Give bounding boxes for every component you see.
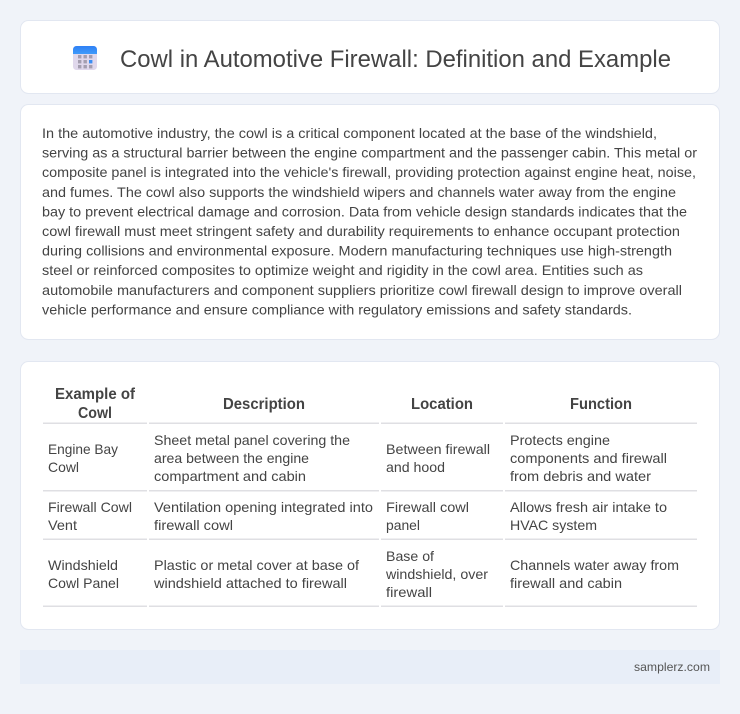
- title: Cowl in Automotive Firewall: Definition and Example: [120, 46, 671, 73]
- table row: engine bay cowl: from debris and water: [510, 468, 651, 484]
- table row: engine bay cowl: [48, 432, 667, 484]
- icon: calendar: [73, 46, 97, 70]
- text block: cowl description: composite panel is integrated into the vehicle's firewall, providing protection against engine heat, noise,: [42, 164, 696, 180]
- table row: engine bay cowl: compartment and cabin: [154, 468, 306, 484]
- table row: firewall cowl vent: Ventilation opening integrated into: [154, 499, 373, 515]
- table row: engine bay cowl: components and firewall: [510, 450, 667, 466]
- table header row: Description: [223, 396, 305, 413]
- table row: firewall cowl vent: Firewall cowl: [386, 499, 469, 515]
- text block: cowl description: and fumes. The cowl also supports the windshield wipers and channels water away from the engine: [42, 184, 676, 200]
- table row: firewall cowl vent: HVAC system: [510, 517, 597, 533]
- table row: windshield cowl panel: Base of: [386, 548, 434, 564]
- text block: cowl description: serving as a structural barrier between the engine compartment and the passenger cabin. This metal or: [42, 145, 697, 161]
- table row: windshield cowl panel: windshield, over: [385, 566, 488, 582]
- table row: engine bay cowl: Protects engine: [510, 432, 610, 448]
- table header row: Location: [411, 396, 473, 413]
- table row: windshield cowl panel: Plastic or metal cover at base of: [154, 557, 359, 573]
- table row: engine bay cowl: Between firewall: [386, 441, 490, 457]
- table row: windshield cowl panel: Windshield: [48, 557, 118, 573]
- text block: cowl description: [42, 125, 697, 317]
- table header row: [55, 386, 632, 422]
- table header row: Example of: [55, 386, 136, 403]
- table row: engine bay cowl: area between the engine: [154, 450, 309, 466]
- table row: windshield cowl panel: Cowl Panel: [48, 575, 119, 591]
- table row: firewall cowl vent: Allows fresh air intake to: [510, 499, 667, 515]
- table row: firewall cowl vent: [48, 499, 667, 533]
- panel: table card: [20, 362, 720, 630]
- panel: description card: [20, 104, 720, 340]
- table row: engine bay cowl: Cowl: [48, 459, 79, 475]
- table header row: Cowl: [78, 405, 112, 422]
- table row: engine bay cowl: Engine Bay: [48, 441, 118, 457]
- table row: firewall cowl vent: Firewall Cowl: [48, 499, 132, 515]
- text block: cowl description: cowl firewall must meet stringent safety and durability requirements to enhance occupant protection: [42, 223, 680, 239]
- table row: windshield cowl panel: windshield attached to firewall: [153, 575, 347, 591]
- table row: engine bay cowl: Sheet metal panel covering the: [154, 432, 350, 448]
- text block: cowl description: steel or reinforced composites to optimize weight and rigidity in the cowl area. Entities such as: [42, 262, 643, 278]
- text block: cowl description: In the automotive industry, the cowl is a critical component located at the base of the windshield,: [42, 125, 657, 141]
- table row: windshield cowl panel: [48, 548, 679, 600]
- table row: firewall cowl vent: Vent: [48, 517, 77, 533]
- text block: cowl description: vehicle performance and ensure compliance with regulatory emissions and safety standards.: [42, 301, 632, 317]
- panel: title card: [20, 20, 720, 94]
- table: examples of cowl: [43, 386, 697, 607]
- table row: engine bay cowl: and hood: [386, 459, 445, 475]
- text block: cowl description: during collisions and environmental exposure. Modern manufacturing techniques use high-strength: [42, 243, 672, 259]
- text block: cowl description: bay to prevent electrical damage and corrosion. Data from vehicle design standards indicates that the: [42, 203, 687, 219]
- table row: windshield cowl panel: firewall and cabin: [510, 575, 622, 591]
- text block: cowl description: automobile manufacturers and component suppliers prioritize cowl firewall design to improve overall: [42, 282, 682, 298]
- footer bar: [20, 650, 720, 684]
- table row: firewall cowl vent: panel: [386, 517, 420, 533]
- table row: firewall cowl vent: firewall cowl: [154, 517, 233, 533]
- table header row: Function: [570, 396, 632, 413]
- footer text: samplerz.com: [634, 660, 710, 674]
- table row: windshield cowl panel: Channels water away from: [510, 557, 679, 573]
- table row: windshield cowl panel: firewall: [386, 584, 432, 600]
